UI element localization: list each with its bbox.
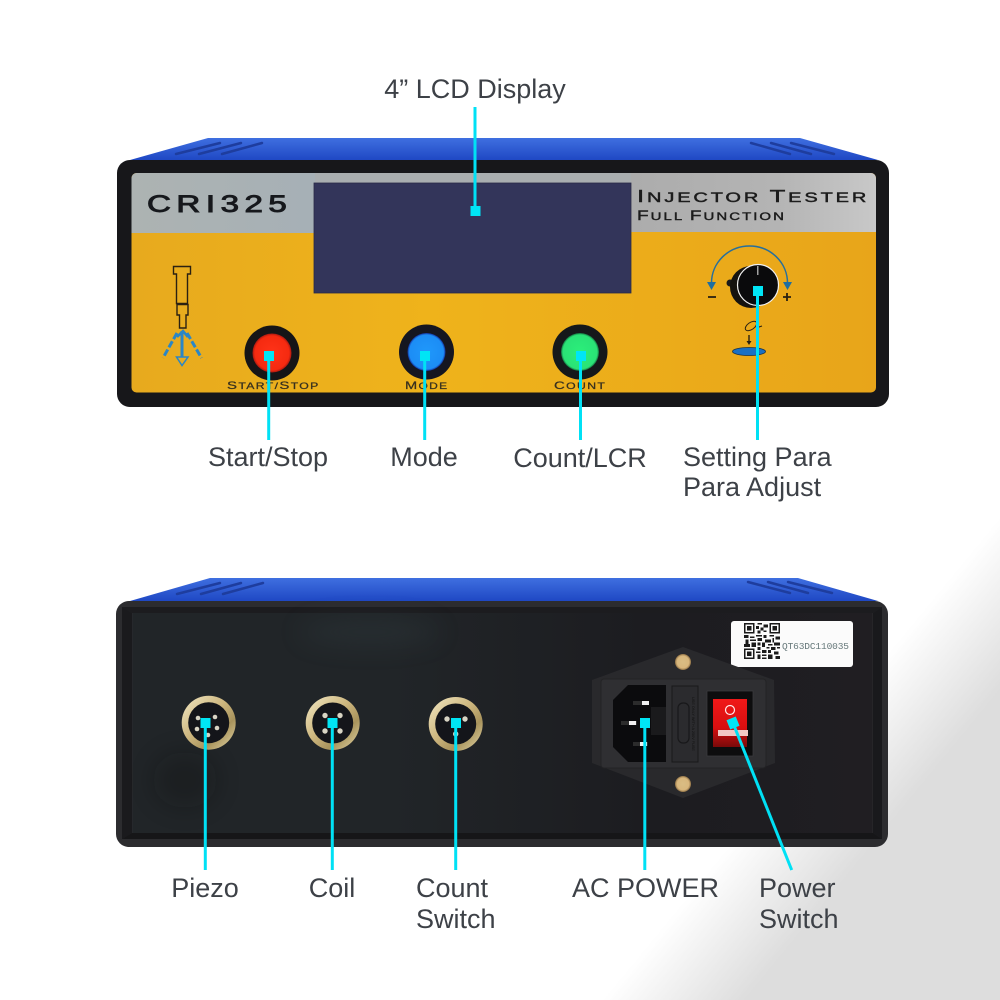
blue top of case, front view xyxy=(130,138,878,160)
connector: Coil socket xyxy=(306,696,360,750)
serial number: QT63DC110035 xyxy=(782,641,849,652)
model name: CRI325: CRI325 xyxy=(147,191,292,218)
fuse cover: USE ONLY WITH A 250V FUSE xyxy=(691,697,695,751)
product subtitle: Full Function: FULL FUNCTION xyxy=(637,207,786,223)
callout: Count Switch line xyxy=(451,718,461,870)
blue top of case, back view xyxy=(130,578,878,601)
rotary knob with adjust arc xyxy=(707,246,792,308)
connector: Count Switch socket xyxy=(429,697,483,751)
back frame xyxy=(116,601,888,847)
Start/Stop button xyxy=(244,326,300,380)
callout: Power Switch line xyxy=(726,716,792,870)
callout: knob line xyxy=(753,286,763,440)
label: Count/LCR: Count/LCR xyxy=(513,443,647,473)
power inlet module xyxy=(592,647,775,798)
back plate xyxy=(132,613,872,833)
button caption: Count: COUNT xyxy=(554,379,606,392)
panel: front of tester xyxy=(117,138,889,407)
Count button xyxy=(552,324,608,380)
panel: back of tester xyxy=(116,578,888,847)
callout: LCD line xyxy=(470,107,480,216)
label: Piezo: Piezo xyxy=(171,873,239,903)
button caption: Mode: MODE xyxy=(405,379,448,392)
icon: press knob xyxy=(732,319,766,356)
yellow fascia xyxy=(132,173,876,392)
label: Power Switch: Switch xyxy=(759,904,839,934)
connector: Piezo socket xyxy=(182,696,236,750)
power rocker switch xyxy=(707,691,753,756)
heading: 4” LCD Display: 4” LCD Display xyxy=(384,74,566,104)
icon: QR code xyxy=(744,623,780,659)
label: Mode: Mode xyxy=(390,442,458,472)
AC socket xyxy=(613,685,666,762)
label: Coil: Coil xyxy=(309,873,355,903)
black front frame xyxy=(117,160,889,407)
screw, top xyxy=(675,654,691,670)
product title: Injector Tester: INJECTOR TESTER xyxy=(637,186,869,206)
button caption: Start/Stop: START/STOP xyxy=(227,379,320,392)
label: Count Switch: Switch xyxy=(416,904,496,934)
callout: Count line xyxy=(576,351,586,440)
label: Power Switch: Power xyxy=(759,873,836,903)
label: Count Switch: Count xyxy=(416,873,489,903)
callout: AC Power line xyxy=(640,718,650,870)
label: Setting Para Para Adjust: Setting Para xyxy=(683,442,833,472)
callout: Piezo line xyxy=(200,718,210,870)
callout: Coil line xyxy=(328,718,338,870)
fuse cover xyxy=(672,686,698,762)
screw, bottom xyxy=(675,776,691,792)
4 inch LCD screen xyxy=(314,183,631,293)
callout: Start/Stop line xyxy=(264,351,274,440)
label: Setting Para Para Adjust: Para Adjust xyxy=(683,472,822,502)
callout: Mode line xyxy=(420,351,430,440)
label: Start/Stop: Start/Stop xyxy=(208,442,328,472)
serial label with QR code xyxy=(731,621,853,667)
label: AC POWER: AC POWER xyxy=(572,873,719,903)
icon: fuel injector spray xyxy=(163,266,202,366)
Mode button xyxy=(399,324,454,380)
